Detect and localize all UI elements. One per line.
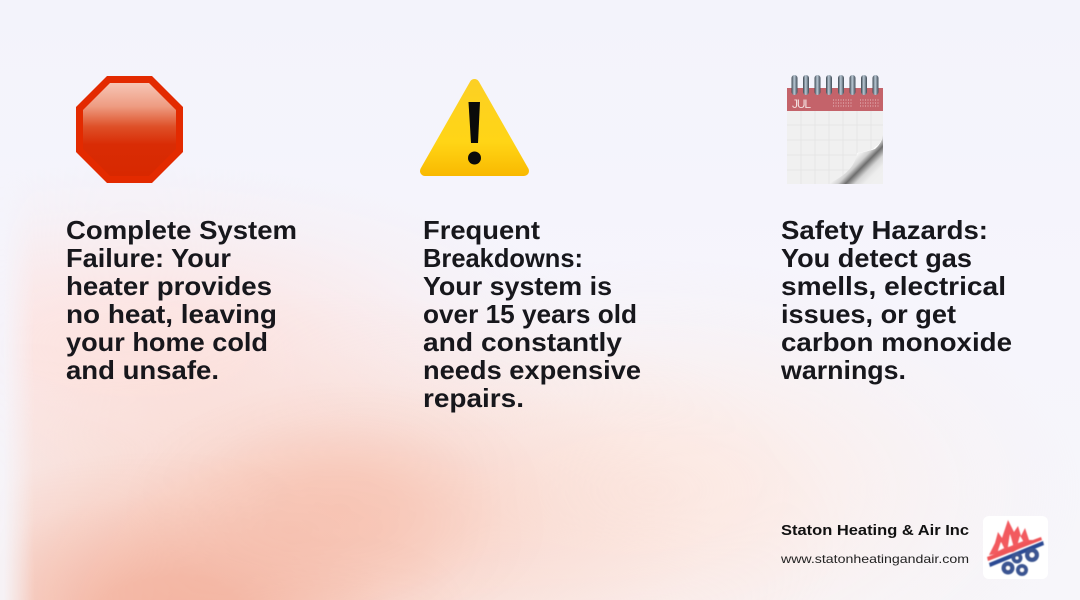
text: frequent breakdowns: needs expensive [423,355,641,385]
text: frequent breakdowns [423,215,641,413]
text: complete system failure: Complete System [66,215,297,245]
text: frequent breakdowns: over 15 years old [423,299,637,329]
text: frequent breakdowns: and constantly [423,327,623,357]
text: complete system failure: and unsafe. [66,355,219,385]
text: safety hazards: You detect gas [781,243,972,273]
icon: calendar: JUL [792,97,811,111]
icon: warning triangle [420,79,529,176]
text: complete system failure: no heat, leaving [66,299,277,329]
text: complete system failure: your home cold [66,327,268,357]
text: complete system failure: Failure: Your [66,243,231,273]
text: complete system failure: heater provides [66,271,272,301]
text: frequent breakdowns: Frequent [423,215,540,245]
text: safety hazards: smells, electrical [781,271,1006,301]
text: safety hazards: carbon monoxide [781,327,1012,357]
company name and website: www.statonheatingandair.com [780,552,969,566]
text: frequent breakdowns: repairs. [423,383,524,413]
text: frequent breakdowns: Breakdowns: [423,243,583,273]
text: safety hazards: warnings. [780,355,906,385]
text: safety hazards [780,215,1012,385]
text: complete system failure [66,215,297,385]
text: safety hazards: issues, or get [781,299,956,329]
text: safety hazards: Safety Hazards: [781,215,988,245]
icon: stop sign [76,76,183,183]
company name and website: Staton Heating & Air Inc [781,522,969,539]
logo [983,516,1048,579]
icon: calendar [787,75,883,184]
company name and website [780,522,969,566]
background gradient [4,221,938,600]
text: frequent breakdowns: Your system is [423,271,612,301]
